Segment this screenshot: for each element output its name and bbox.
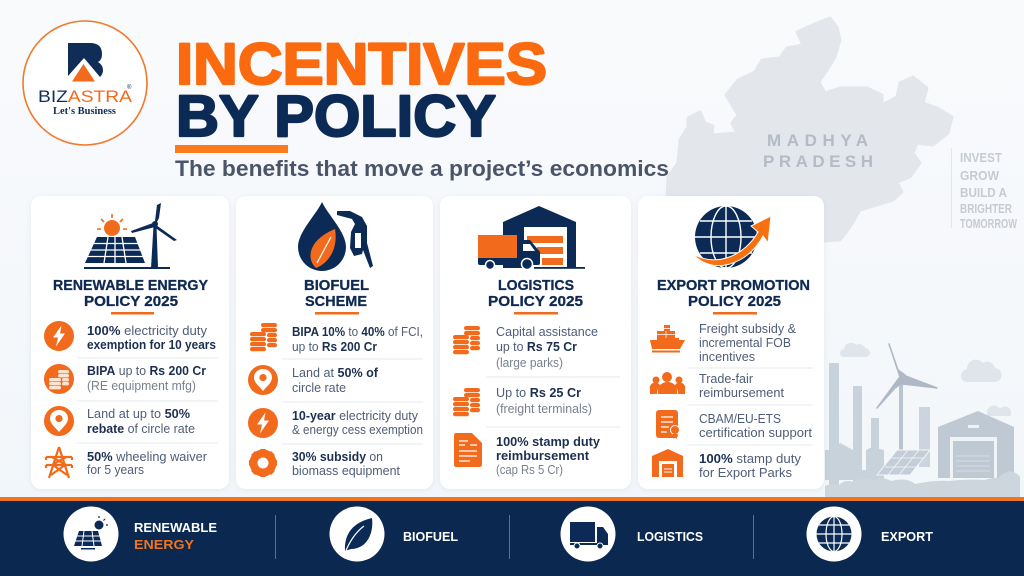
benefit: freight subsidy: incremental FOB xyxy=(699,336,791,350)
title: BY POLICY xyxy=(176,84,496,149)
benefit: BIPA xyxy=(250,323,423,354)
benefit: land rebate: Land at up to 50% xyxy=(87,407,190,421)
benefit: freight subsidy: incentives xyxy=(699,350,755,364)
heading: LOGISTICS xyxy=(498,277,574,294)
panel: logistics xyxy=(440,196,631,489)
benefit: stamp duty: reimbursement xyxy=(496,449,590,463)
benefit: freight terminals: (freight terminals) xyxy=(496,402,592,416)
benefit: export parks: 100% stamp duty xyxy=(699,452,802,466)
benefit: land: Land at 50% of xyxy=(292,366,379,380)
icon: globe with rising arrow xyxy=(693,206,771,268)
heading xyxy=(304,277,369,310)
logo wordmark: BIZASTRA xyxy=(38,87,133,106)
benefit: electricity duty: 10-year electricity duty xyxy=(292,409,419,423)
heading xyxy=(657,277,810,310)
benefit: land: circle rate xyxy=(292,381,346,395)
footer item: renewable energy xyxy=(64,506,217,562)
benefit: electricity duty: exemption for 10 years xyxy=(87,338,216,352)
footer item: export: EXPORT xyxy=(881,529,933,544)
heading: EXPORT PROMOTION xyxy=(657,277,810,294)
heading underline xyxy=(111,312,154,314)
footer item: export xyxy=(806,506,933,562)
benefit: electricity duty xyxy=(44,321,216,352)
benefit: BIPA: BIPA 10% to 40% of FCI, xyxy=(292,325,423,339)
title: INCENTIVES xyxy=(176,32,547,97)
footer item: renewable energy: ENERGY xyxy=(134,537,194,552)
footer item: biofuel xyxy=(330,506,458,562)
heading: POLICY 2025 xyxy=(488,293,583,310)
heading: POLICY 2025 xyxy=(84,293,178,310)
benefit: capital assistance: (large parks) xyxy=(496,356,563,370)
heading underline xyxy=(713,312,757,314)
map label xyxy=(763,131,873,171)
benefit: electricity duty: 100% electricity duty xyxy=(87,324,208,338)
side slogan: INVEST xyxy=(960,151,1002,165)
benefit: capital assistance xyxy=(453,325,598,370)
heading: RENEWABLE ENERGY xyxy=(53,277,208,294)
benefit: wheeling waiver: for 5 years xyxy=(87,463,144,477)
industrial skyline illustration xyxy=(825,343,1020,497)
benefit: wheeling waiver xyxy=(46,447,207,478)
benefit: BIPA xyxy=(44,364,206,394)
benefit: biomass subsidy xyxy=(249,449,401,478)
benefit: stamp duty: 100% stamp duty xyxy=(496,435,600,449)
side slogan: GROW xyxy=(960,169,999,183)
benefit: electricity duty: & energy cess exemption xyxy=(292,423,423,437)
title xyxy=(176,32,547,149)
benefit: capital assistance: Capital assistance xyxy=(496,325,598,339)
benefit: BIPA: up to Rs 200 Cr xyxy=(292,340,377,354)
panel: export promotion xyxy=(638,196,824,489)
footer item: renewable energy: RENEWABLE xyxy=(134,520,217,535)
benefit: freight subsidy xyxy=(650,322,797,364)
heading: BIOFUEL xyxy=(304,277,369,294)
footer bar xyxy=(0,497,1024,576)
benefit: stamp duty: (cap Rs 5 Cr) xyxy=(496,463,563,477)
footer item: logistics: LOGISTICS xyxy=(637,529,703,544)
heading xyxy=(488,277,583,310)
subtitle: The benefits that move a project’s economics xyxy=(175,156,669,181)
benefit: BIPA: (RE equipment mfg) xyxy=(87,379,196,393)
benefit: freight terminals xyxy=(453,386,592,416)
icon: solar panel and wind turbine xyxy=(84,203,177,269)
icon: warehouse and truck xyxy=(478,206,585,270)
side slogan: BRIGHTER xyxy=(960,202,1012,216)
heading underline xyxy=(315,312,359,314)
benefit: certification: certification support xyxy=(699,426,813,440)
side slogan xyxy=(951,148,1017,231)
benefit: trade fair: reimbursement xyxy=(699,386,785,400)
benefit: freight terminals: Up to Rs 25 Cr xyxy=(496,386,581,400)
heading xyxy=(53,277,208,310)
benefit: export parks xyxy=(652,449,802,480)
benefit: trade fair xyxy=(650,372,785,400)
panel: renewable energy xyxy=(31,196,229,489)
benefit: certification xyxy=(656,410,813,440)
panel: biofuel xyxy=(236,196,433,489)
icon: fuel drop and pump nozzle xyxy=(298,202,373,271)
benefit: electricity duty xyxy=(248,408,423,438)
benefit: freight subsidy: Freight subsidy & xyxy=(699,322,797,336)
benefit: export parks: for Export Parks xyxy=(699,466,792,480)
benefit: BIPA: BIPA up to Rs 200 Cr xyxy=(87,364,206,378)
benefit: wheeling waiver: 50% wheeling waiver xyxy=(87,450,207,464)
benefit: land xyxy=(248,365,379,395)
footer item: biofuel: BIOFUEL xyxy=(403,529,458,544)
benefit: stamp duty xyxy=(454,433,600,477)
logo tagline: Let's Business xyxy=(53,106,116,117)
benefit: biomass subsidy: biomass equipment xyxy=(292,464,401,478)
benefit: land rebate: rebate of circle rate xyxy=(87,422,195,436)
logo badge xyxy=(23,21,147,145)
heading: POLICY 2025 xyxy=(688,293,781,310)
benefit: certification: CBAM/EU-ETS xyxy=(699,412,781,426)
map of Madhya Pradesh xyxy=(667,18,952,241)
heading: SCHEME xyxy=(305,293,367,310)
benefit: capital assistance: up to Rs 75 Cr xyxy=(496,340,577,354)
side slogan: BUILD A xyxy=(960,186,1007,200)
benefit: trade fair: Trade-fair xyxy=(699,372,753,386)
map label: PRADESH xyxy=(763,152,873,171)
footer item: logistics xyxy=(560,506,703,562)
logo wordmark: ® xyxy=(127,84,132,91)
logo mark xyxy=(68,43,103,82)
benefit: land rebate xyxy=(44,406,195,436)
benefit: biomass subsidy: 30% subsidy on xyxy=(292,450,383,464)
title underline xyxy=(175,145,288,153)
map label: MADHYA xyxy=(767,131,868,150)
heading underline xyxy=(514,312,558,314)
